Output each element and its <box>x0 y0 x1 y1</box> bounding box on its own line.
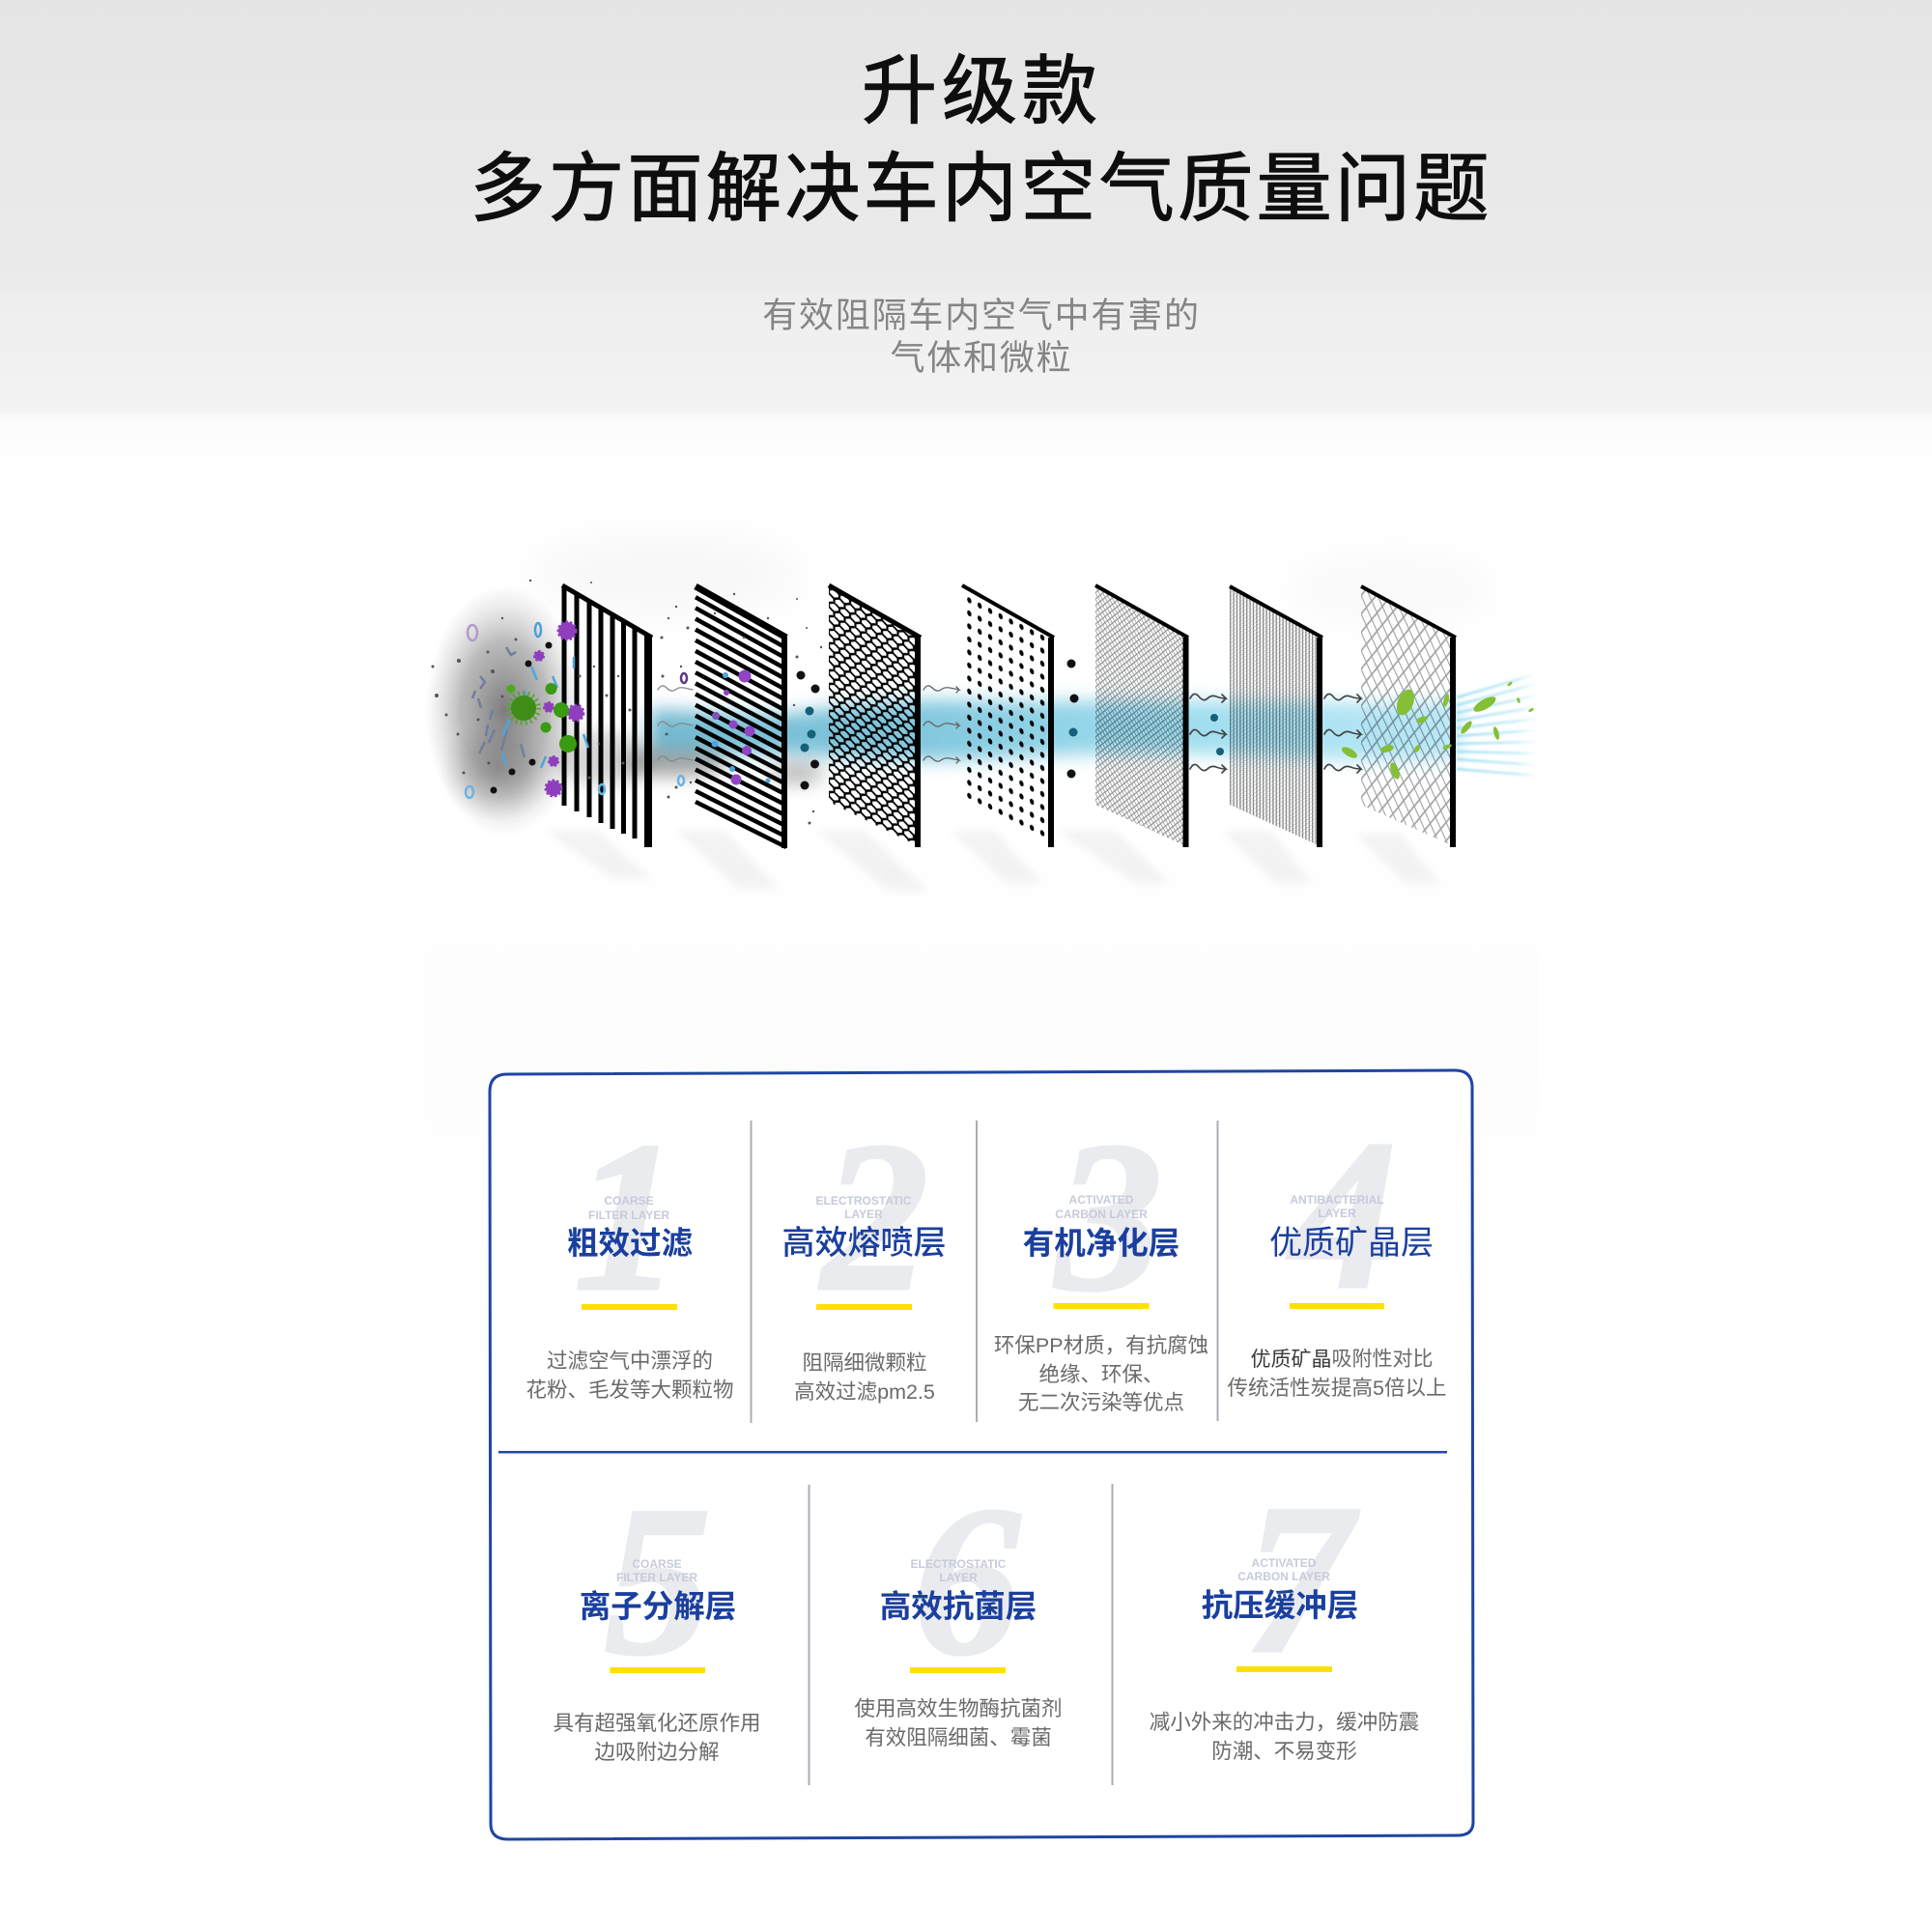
yellow bar <box>611 1667 705 1673</box>
english label <box>911 1557 1007 1584</box>
description: 减小外来的冲击力，缓冲防震 <box>1150 1711 1419 1734</box>
number 1: 1 <box>574 1098 680 1336</box>
yellow bar <box>582 1304 677 1310</box>
english label: ELECTROSTATIC <box>911 1557 1007 1571</box>
description <box>526 1350 734 1402</box>
clean air flow band <box>649 700 1459 761</box>
description <box>1150 1711 1419 1763</box>
filter 5: fine grey mesh <box>1095 585 1188 847</box>
filter 6: fine vertical mesh <box>1230 586 1322 847</box>
english label <box>1290 1193 1384 1220</box>
heading: 抗压缓冲层 <box>1202 1588 1358 1623</box>
filter 4: dotted layer <box>962 585 1054 847</box>
description: 具有超强氧化还原作用 <box>553 1712 761 1735</box>
filter 7: diamond mesh <box>1361 586 1456 847</box>
description: 花粉、毛发等大颗粒物 <box>526 1378 734 1402</box>
english label: CARBON LAYER <box>1237 1570 1330 1583</box>
column dividers <box>750 1121 1219 1785</box>
number 5: 5 <box>605 1463 711 1700</box>
description: 使用高效生物酶抗菌剂 <box>854 1697 1063 1720</box>
teal particles <box>800 707 1224 755</box>
yellow bar <box>816 1304 912 1310</box>
card 7: compression buffer layer <box>1150 1461 1419 1763</box>
fine dust specks <box>431 580 822 825</box>
description <box>994 1334 1208 1414</box>
layer card frame <box>490 1070 1473 1839</box>
title <box>470 48 1492 231</box>
card 5: ion decomposition layer <box>553 1463 761 1764</box>
description <box>794 1351 935 1404</box>
english label: LAYER <box>939 1571 978 1584</box>
description: 环保PP材质，有抗腐蚀 <box>994 1334 1208 1357</box>
title: 升级款 <box>862 48 1102 133</box>
english label: COARSE <box>632 1557 682 1571</box>
air fan lines at outlet <box>1457 674 1536 776</box>
english label: LAYER <box>1318 1207 1356 1220</box>
number 6: 6 <box>914 1463 1020 1700</box>
yellow bar <box>1053 1303 1150 1309</box>
heading: 离子分解层 <box>580 1589 736 1624</box>
english label: ACTIVATED <box>1069 1193 1134 1207</box>
english label <box>816 1194 912 1221</box>
number 4: 4 <box>1287 1096 1397 1334</box>
english label: ELECTROSTATIC <box>816 1194 912 1208</box>
black particles <box>491 641 1078 794</box>
description: 高效过滤pm2.5 <box>794 1380 935 1404</box>
english label <box>588 1194 669 1222</box>
yellow bar <box>910 1667 1006 1673</box>
description: 防潮、不易变形 <box>1211 1740 1357 1763</box>
english label: FILTER LAYER <box>588 1208 669 1222</box>
english label <box>1055 1193 1148 1221</box>
card 4: mineral crystal layer <box>1228 1096 1446 1400</box>
row divider <box>498 1451 1447 1453</box>
description: 过滤空气中漂浮的 <box>547 1350 713 1373</box>
description: 阻隔细微颗粒 <box>802 1351 927 1375</box>
subtitle <box>762 296 1201 377</box>
number 2: 2 <box>819 1098 929 1336</box>
subtitle: 有效阻隔车内空气中有害的 <box>762 296 1201 334</box>
card 1: coarse filter <box>526 1098 734 1402</box>
heading: 粗效过滤 <box>567 1226 693 1261</box>
blue and purple debris <box>466 623 687 798</box>
pollutant smoke cloud <box>425 585 824 837</box>
filter 2: diagonal stripes <box>696 586 787 848</box>
heading: 有机净化层 <box>1023 1226 1179 1261</box>
purple and blue particles on filter 2 <box>711 670 771 784</box>
heading: 高效抗菌层 <box>880 1589 1037 1624</box>
card 2: melt-blown layer <box>782 1098 947 1404</box>
yellow bar <box>1236 1666 1332 1672</box>
description: 优质矿晶吸附性对比 <box>1250 1349 1434 1370</box>
number 7: 7 <box>1244 1461 1360 1698</box>
filter 3: honeycomb mesh <box>829 585 921 847</box>
english label: ACTIVATED <box>1252 1556 1317 1570</box>
english label: LAYER <box>844 1208 883 1221</box>
card 3: organic purification layer <box>994 1098 1208 1414</box>
floor shadows <box>546 831 1439 891</box>
description <box>1228 1349 1446 1400</box>
filter 1: coarse vertical bars <box>562 585 652 847</box>
english label: CARBON LAYER <box>1055 1208 1148 1221</box>
english label <box>616 1557 697 1584</box>
description <box>854 1697 1063 1749</box>
wavy arrows between layers <box>658 686 1361 773</box>
description: 有效阻隔细菌、霉菌 <box>865 1726 1052 1749</box>
title: 多方面解决车内空气质量问题 <box>470 146 1492 231</box>
virus particles purple <box>534 622 583 796</box>
number 3: 3 <box>1053 1098 1163 1336</box>
subtitle: 气体和微粒 <box>890 338 1073 377</box>
english label: FILTER LAYER <box>616 1571 697 1584</box>
yellow bar <box>1290 1303 1384 1309</box>
description <box>553 1712 761 1764</box>
heading: 高效熔喷层 <box>782 1225 947 1262</box>
english label: ANTIBACTERIAL <box>1290 1193 1384 1207</box>
description: 无二次污染等优点 <box>1018 1391 1184 1414</box>
green leaves <box>1340 681 1534 781</box>
card 6: antibacterial layer <box>854 1463 1063 1749</box>
filter layers diagram <box>425 580 1536 891</box>
english label <box>1237 1556 1330 1583</box>
description: 边吸附边分解 <box>594 1741 720 1764</box>
virus particles green <box>506 683 577 753</box>
heading: 优质矿晶层 <box>1269 1225 1434 1262</box>
description: 绝缘、环保、 <box>1038 1363 1164 1386</box>
description: 传统活性炭提高5倍以上 <box>1228 1377 1446 1400</box>
english label: COARSE <box>604 1194 654 1208</box>
